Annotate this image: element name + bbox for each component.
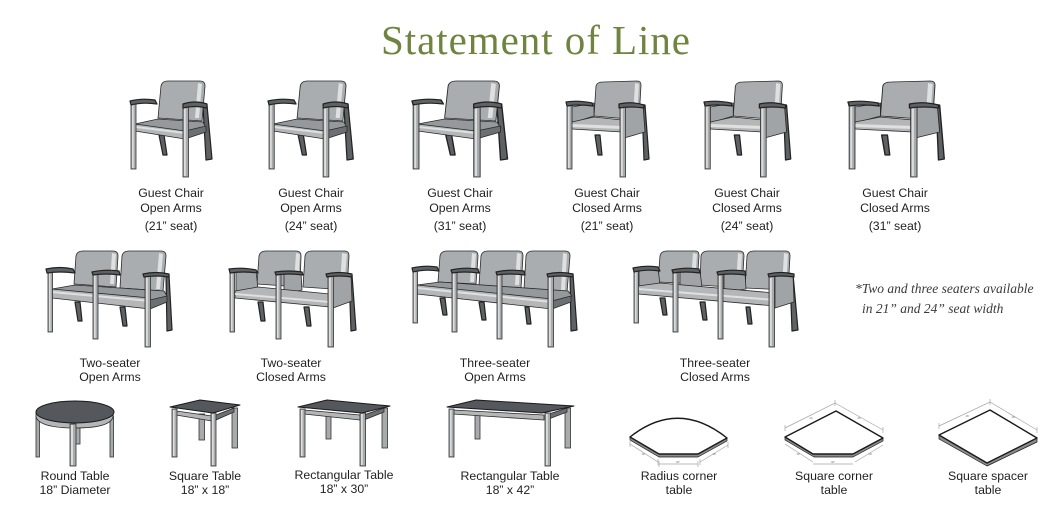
- availability note: [855, 281, 1033, 316]
- three-seater closed arms: Closed Arms: [680, 370, 750, 384]
- three-seater open arms: Three-seater: [460, 356, 530, 370]
- square corner table: 18: [796, 452, 800, 456]
- radius corner table: 40”: [676, 460, 680, 464]
- rectangular table 30: Rectangular Table: [295, 468, 394, 482]
- two-seater closed arms: Closed Arms: [256, 370, 326, 384]
- square corner table: 26: [809, 416, 813, 420]
- guest chair open arms 21: Open Arms: [140, 201, 202, 215]
- three-seater open arms: [412, 251, 577, 384]
- square corner table: [785, 400, 883, 497]
- square spacer table: 18: [965, 414, 969, 418]
- radius corner table: 18: [641, 452, 645, 456]
- square spacer table: [939, 399, 1037, 497]
- square corner table: 26: [857, 416, 861, 420]
- guest chair open arms 31: Open Arms: [429, 201, 491, 215]
- round table: [36, 401, 114, 497]
- rectangular table 30: [295, 400, 394, 496]
- guest chair closed arms 24: Closed Arms: [712, 201, 782, 215]
- guest chair closed arms 31: (31” seat): [869, 219, 921, 233]
- square corner table: table: [821, 483, 847, 497]
- guest chair closed arms 21: Closed Arms: [572, 201, 642, 215]
- three-seater closed arms: [633, 251, 798, 384]
- availability note: in 21” and 24” seat width: [862, 301, 1004, 316]
- rectangular table 42: Rectangular Table: [461, 469, 560, 483]
- guest chair open arms 24: (24” seat): [285, 219, 337, 233]
- square spacer table: table: [975, 483, 1001, 497]
- square table: 18” x 18”: [181, 483, 229, 497]
- guest chair open arms 21: [130, 81, 212, 233]
- guest chair open arms 24: Open Arms: [280, 201, 342, 215]
- radius corner table: table: [666, 483, 692, 497]
- two-seater closed arms: Two-seater: [261, 356, 321, 370]
- two-seater closed arms: [229, 251, 356, 384]
- two-seater open arms: [46, 251, 172, 384]
- square table: Square Table: [169, 469, 241, 483]
- guest chair closed arms 24: Guest Chair: [714, 186, 780, 200]
- radius corner table: Radius corner: [641, 469, 717, 483]
- guest chair open arms 21: (21” seat): [145, 219, 197, 233]
- guest chair closed arms 31: [848, 81, 944, 233]
- three-seater closed arms: Three-seater: [680, 356, 750, 370]
- rectangular table 30: 18” x 30”: [320, 482, 368, 496]
- rectangular table 42: [447, 400, 574, 497]
- round table: Round Table: [41, 469, 110, 483]
- guest chair open arms 31: Guest Chair: [427, 186, 493, 200]
- guest chair open arms 21: Guest Chair: [138, 186, 204, 200]
- square spacer table: 18: [1011, 415, 1015, 419]
- guest chair open arms 31: [412, 81, 508, 233]
- availability note: *Two and three seaters available: [855, 281, 1033, 296]
- square corner table: 40”: [831, 460, 835, 464]
- guest chair closed arms 31: Guest Chair: [862, 186, 928, 200]
- guest chair closed arms 31: Closed Arms: [860, 201, 930, 215]
- square table: [169, 400, 241, 497]
- guest chair open arms 24: [268, 81, 353, 233]
- two-seater open arms: Two-seater: [80, 356, 140, 370]
- three-seater open arms: Open Arms: [464, 370, 526, 384]
- guest chair closed arms 21: Guest Chair: [574, 186, 640, 200]
- guest chair open arms 24: Guest Chair: [278, 186, 344, 200]
- square corner table: 18: [868, 452, 872, 456]
- guest chair open arms 31: (31” seat): [434, 219, 486, 233]
- radius corner table: [630, 418, 728, 497]
- square corner table: Square corner: [795, 469, 873, 483]
- guest chair closed arms 24: [704, 81, 791, 233]
- two-seater open arms: Open Arms: [79, 370, 141, 384]
- guest chair closed arms 21: (21” seat): [581, 219, 633, 233]
- round table: 18” Diameter: [39, 483, 111, 497]
- guest chair closed arms 24: (24” seat): [721, 219, 773, 233]
- radius corner table: 18: [712, 452, 716, 456]
- title: Statement of Line: [381, 17, 691, 63]
- square spacer table: Square spacer: [948, 469, 1028, 483]
- rectangular table 42: 18” x 42”: [486, 483, 534, 497]
- guest chair closed arms 21: [566, 81, 649, 233]
